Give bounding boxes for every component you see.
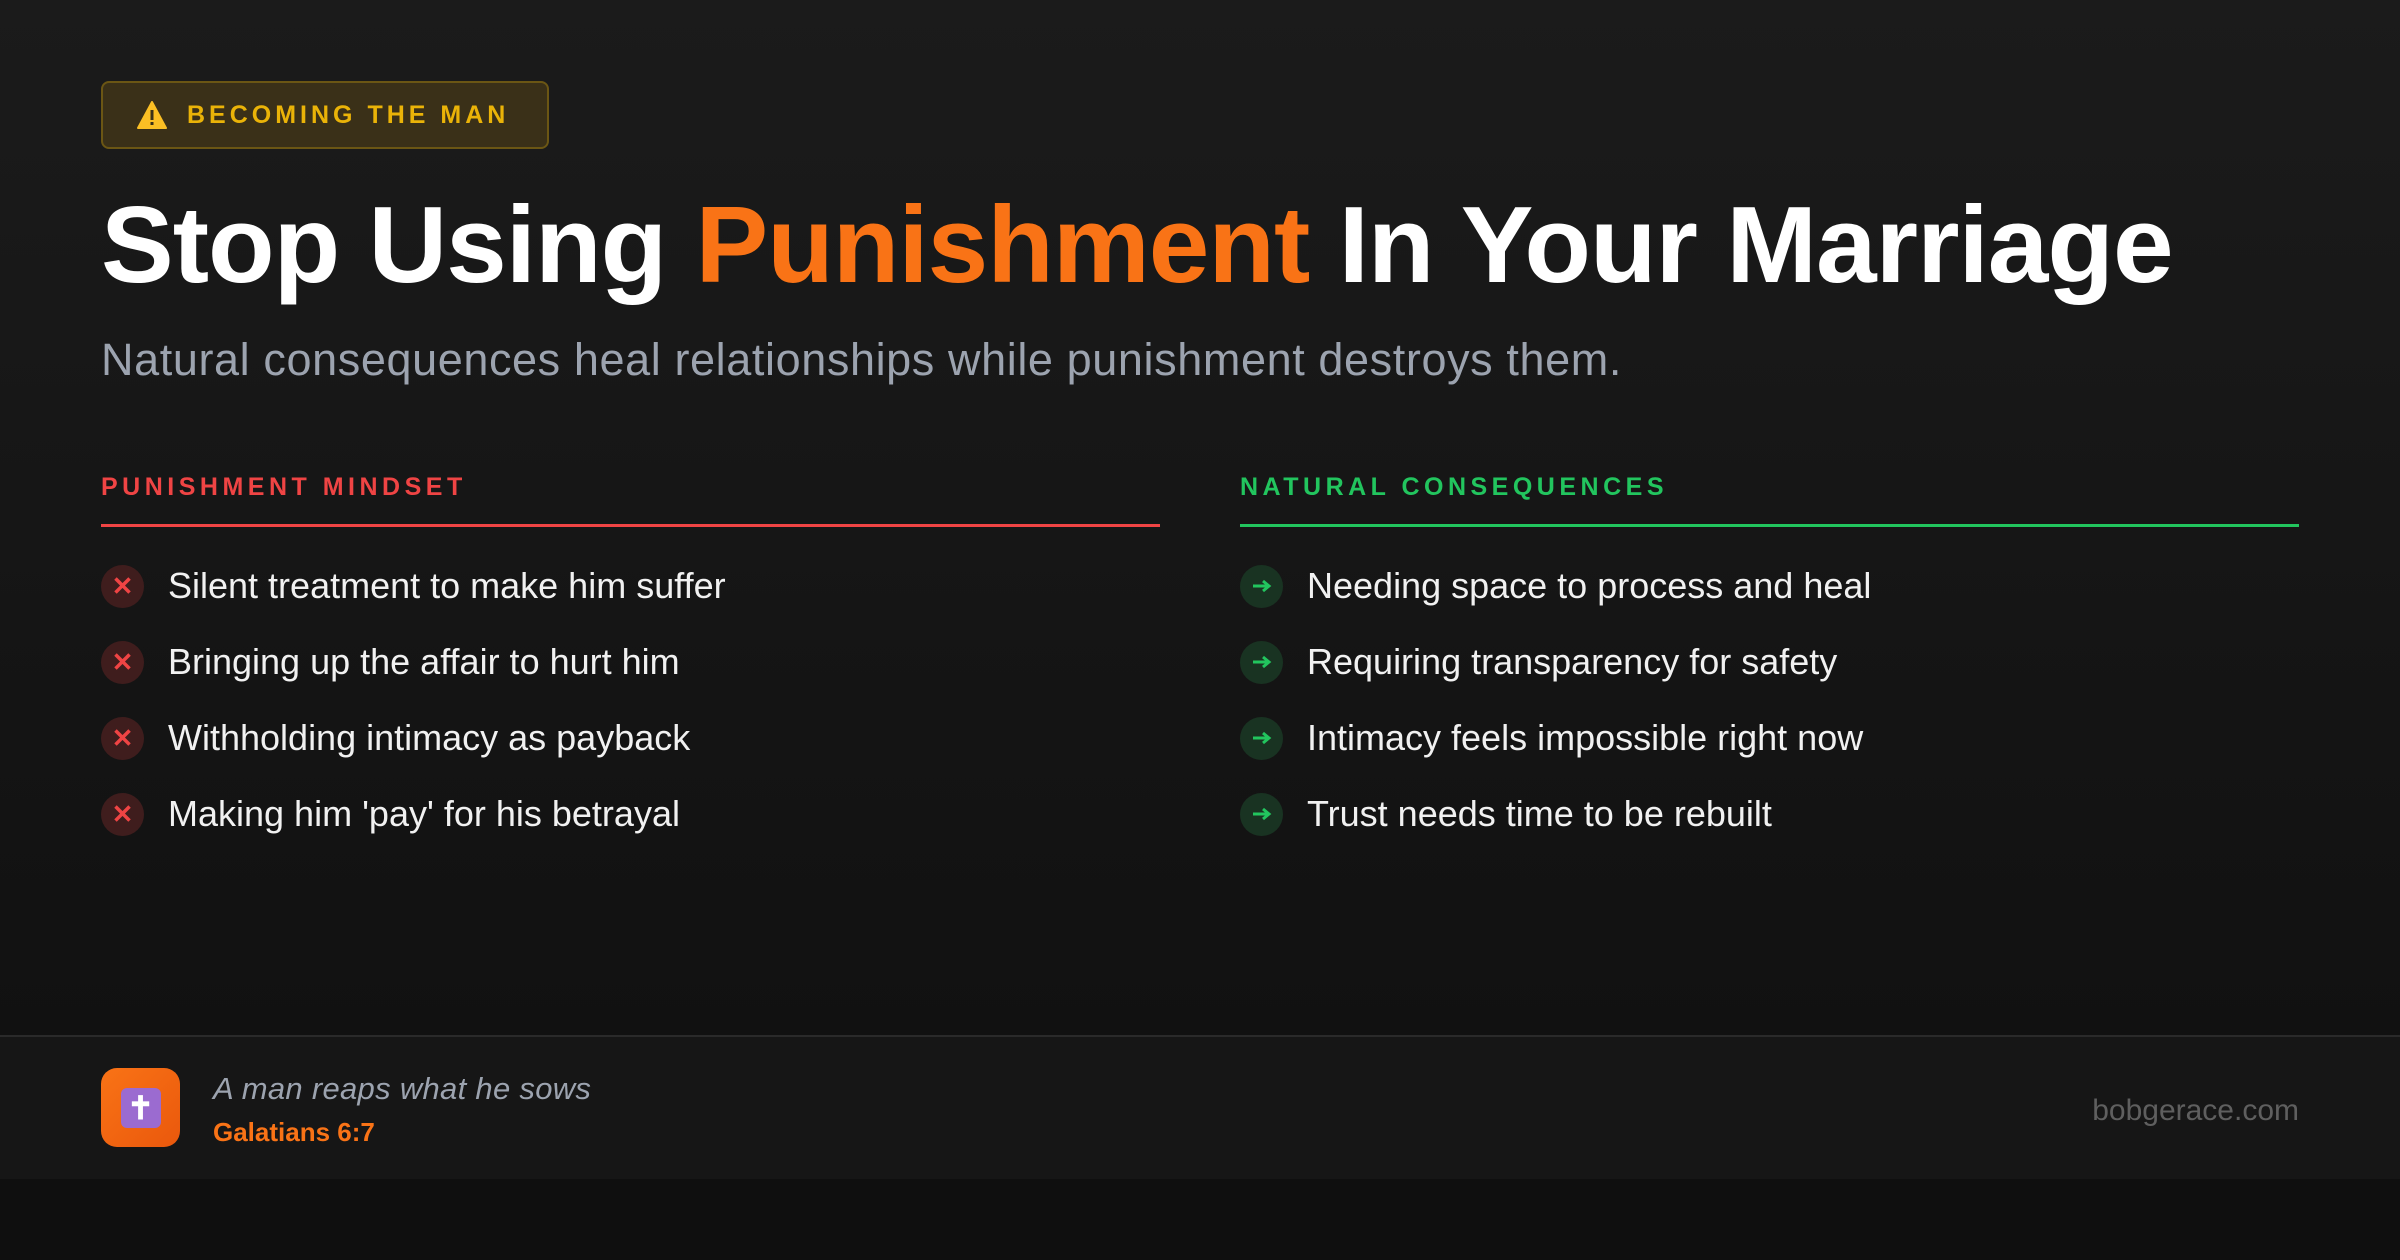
- item: Withholding intimacy as payback: [168, 717, 690, 758]
- heading: natural consequences: [1240, 470, 2299, 527]
- heading: punishment mindset: PUNISHMENT MINDSET: [101, 473, 467, 501]
- footer: [0, 1035, 2400, 1179]
- item: Bringing up the affair to hurt him: [168, 641, 680, 682]
- item: ✕: [112, 722, 133, 752]
- item: Requiring transparency for safety: [1307, 641, 1837, 682]
- website: bobgerace.com: [2092, 1094, 2299, 1127]
- item: Silent treatment to make him suffer: [168, 565, 726, 606]
- subtitle: Natural consequences heal relationships while punishment destroys them.: [101, 334, 1622, 385]
- reference: Galatians 6:7: [213, 1117, 375, 1147]
- quote: A man reaps what he sows: [213, 1071, 591, 1106]
- item: Making him 'pay' for his betrayal: [168, 793, 680, 834]
- panel: natural consequences: [1240, 473, 2299, 836]
- badge: BECOMING THE MAN: [187, 100, 509, 128]
- icon: cross: [101, 1068, 180, 1147]
- icon: cross: ✝: [127, 1090, 154, 1126]
- item: ✕: [112, 646, 133, 676]
- title: Stop Using Punishment In Your Marriage: [101, 184, 2173, 306]
- item: Trust needs time to be rebuilt: [1307, 793, 1772, 834]
- heading: punishment mindset: [101, 470, 1160, 527]
- item: Needing space to process and heal: [1307, 565, 1871, 606]
- item: ✕: [112, 570, 133, 600]
- item: ✕: [112, 798, 133, 828]
- heading: natural consequences: NATURAL CONSEQUENCES: [1240, 473, 1668, 501]
- panel: punishment mindset: [101, 473, 1160, 836]
- item: Intimacy feels impossible right now: [1307, 717, 1863, 758]
- badge: [101, 81, 549, 149]
